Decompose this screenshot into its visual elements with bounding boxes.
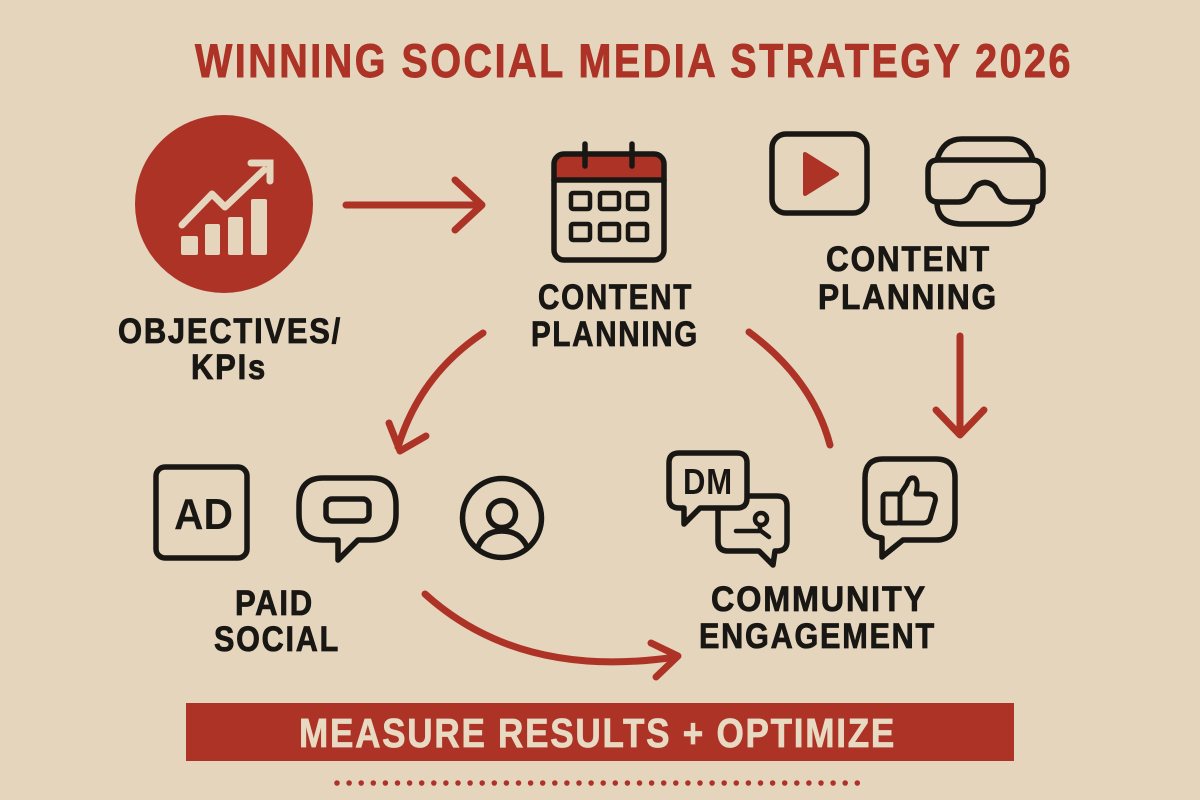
label: content planning (formats): CONTENT — [826, 240, 991, 279]
label: content planning (formats) — [818, 240, 998, 317]
icon: DM chat bubbles: DM — [683, 461, 733, 502]
label: paid social: SOCIAL — [214, 620, 340, 659]
arrow: curved from engagement up to content planning — [749, 332, 830, 445]
arrow: objectives to content planning — [346, 180, 482, 230]
icon: VR headset — [928, 139, 1043, 224]
dotted divider — [337, 780, 858, 786]
icon: AD square — [156, 467, 247, 558]
icon: DM chat bubbles — [669, 453, 787, 565]
icon: user profile — [462, 478, 542, 558]
label: community engagement — [699, 580, 936, 656]
banner: measure results + optimize: MEASURE RESULTS + OPTIMIZE — [299, 710, 896, 756]
label: content planning (calendar) — [531, 278, 699, 354]
icon: thumbs up bubble — [865, 459, 955, 557]
label: content planning (calendar): PLANNING — [531, 315, 699, 354]
icon: calendar — [554, 144, 664, 260]
icon: speech bubble — [299, 478, 396, 560]
label: paid social — [214, 584, 340, 659]
label: content planning (calendar): CONTENT — [538, 278, 693, 317]
label: community engagement: COMMUNITY — [711, 580, 927, 619]
label: content planning (formats): PLANNING — [818, 278, 998, 317]
icon: objectives growth chart — [135, 115, 313, 293]
label: paid social: PAID — [235, 584, 314, 623]
label: objectives / KPIs — [118, 312, 342, 387]
arrow: formats down to engagement — [936, 336, 984, 435]
arrow: curved paid social to engagement — [425, 594, 678, 677]
arrow: curved back to paid social — [389, 333, 483, 451]
icon: video play — [772, 134, 867, 213]
label: objectives / KPIs: OBJECTIVES/ — [118, 312, 342, 351]
label: objectives / KPIs: KPIs — [191, 348, 267, 387]
label: community engagement: ENGAGEMENT — [699, 617, 936, 656]
icon: AD square: AD — [174, 490, 233, 539]
banner: measure results + optimize — [186, 703, 1014, 761]
